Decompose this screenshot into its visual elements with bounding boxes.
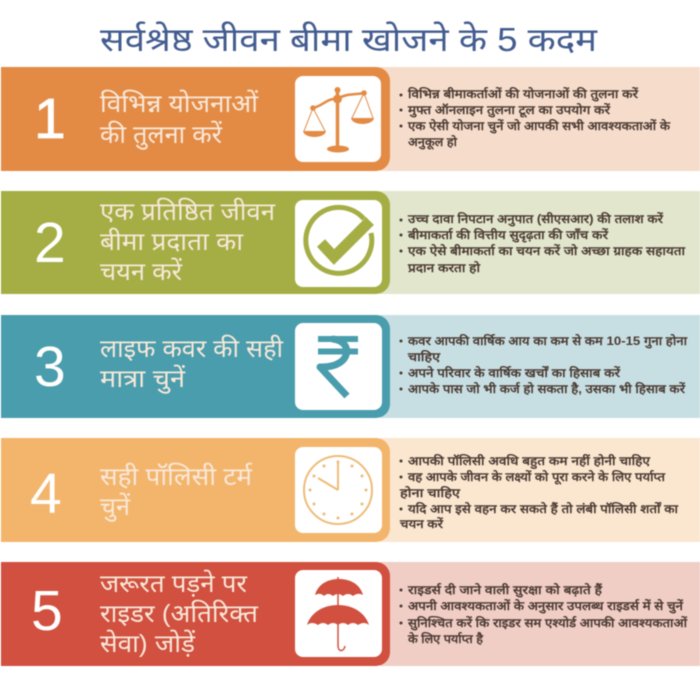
step 3 heading: लाइफ कवर की सही <box>100 334 284 363</box>
step 4 heading: सही पॉलिसी टर्म <box>100 462 253 491</box>
step 2 details: प्रदान करता हो <box>407 261 481 275</box>
step 2 details <box>400 212 686 275</box>
step 3 details: अपने परिवार के वार्षिक खर्चों का हिसाब करें <box>408 366 621 380</box>
step 1 heading <box>100 89 258 150</box>
panel: step 3 <box>1 315 700 418</box>
step 4 icon: clock <box>295 447 382 533</box>
step 5 heading: सेवा) जोड़ें <box>100 629 196 658</box>
step 2 details: उच्च दावा निपटान अनुपात (सीएसआर) की तलाश करें <box>407 212 664 227</box>
step 1 heading: की तुलना करें <box>100 120 223 150</box>
step 2 heading <box>100 197 276 286</box>
step 2 heading: एक प्रतिष्ठित जीवन <box>100 197 276 226</box>
step 3 detail background <box>380 315 700 418</box>
step 5 colour band <box>1 562 390 666</box>
step 1 number: 1 <box>34 87 66 151</box>
step 1 details: एक ऐसी योजना चुनें जो आपकी सभी आवश्यकताओं के <box>407 119 671 134</box>
step 1 details: मुफ्त ऑनलाइन तुलना टूल का उपयोग करें <box>407 103 611 118</box>
step 5 details: राइडर्स दी जाने वाली सुरक्षा को बढ़ाते हैं <box>407 583 603 598</box>
step 3 details: आपके पास जो भी कर्ज हो सकता है, उसका भी हिसाब करें <box>408 382 686 396</box>
step 3 details: चाहिए <box>407 350 442 364</box>
step 3 heading: मात्रा चुनें <box>100 364 186 394</box>
step 4 details <box>399 453 679 531</box>
step 4 details: यदि आप इसे वहन कर सकते हैं तो लंबी पॉलिसी शर्तों का <box>407 502 679 516</box>
step 4 number: 4 <box>30 462 62 526</box>
step 1 details <box>400 87 671 150</box>
step 5 icon: umbrellas <box>295 570 382 657</box>
step 4 heading <box>100 462 253 522</box>
step 2 number: 2 <box>34 211 66 275</box>
step 1 details: अनुकूल हो <box>408 135 458 150</box>
step 1 icon: scales <box>295 76 381 162</box>
step 2 colour band <box>1 191 390 294</box>
step 4 details: आपकी पॉलिसी अवधि बहुत कम नहीं होनी चाहिए <box>408 453 652 470</box>
step 5 number: 5 <box>31 579 63 643</box>
step 2 heading: बीमा प्रदाता का <box>100 227 244 256</box>
step 5 details: के लिए पर्याप्त है <box>407 632 484 646</box>
step 3 number: 3 <box>34 335 66 399</box>
step 3 icon: rupee <box>295 323 382 410</box>
step 2 details: बीमाकर्ता की वित्तीय सुदृढ़ता की जाँच करें <box>407 228 609 243</box>
step 1 colour band <box>1 67 390 171</box>
step 3 heading <box>100 334 284 394</box>
step 4 colour band <box>1 438 390 542</box>
step 5 heading <box>100 569 259 658</box>
step 5 heading: राइडर (अतिरिक्त <box>100 599 259 628</box>
step 5 details: अपनी आवश्यकताओं के अनुसार उपलब्ध राइडर्स में से चुनें <box>408 599 684 614</box>
step 1 details: विभिन्न बीमाकर्ताओं की योजनाओं की तुलना करें <box>407 87 639 102</box>
step 2 icon: check mark <box>295 200 382 287</box>
step 3 details: कवर आपकी वार्षिक आय का कम से कम 10-15 गुना होना <box>407 334 688 349</box>
step 3 details <box>400 334 688 396</box>
title: सर्वश्रेष्ठ जीवन बीमा खोजने के 5 कदम <box>100 21 598 58</box>
panel: step 4 <box>1 438 700 542</box>
step 5 detail background <box>380 562 700 666</box>
panel: step 2 <box>1 191 700 294</box>
step 5 details: सुनिश्चित करें कि राइडर सम एश्योर्ड आपकी आवश्यकताओं <box>407 616 688 631</box>
panel: step 1 <box>1 67 700 171</box>
step 4 details: वह आपके जीवन के लक्ष्यों को पूरा करने के लिए पर्याप्त <box>407 470 666 485</box>
step 2 heading: चयन करें <box>100 257 183 286</box>
step 4 detail background <box>380 438 700 542</box>
panel: step 5 <box>1 562 700 666</box>
step 5 heading: जरूरत पड़ने पर <box>100 569 248 598</box>
step 4 details: चयन करें <box>399 517 444 531</box>
step 2 detail background <box>380 191 700 294</box>
step 4 heading: चुनें <box>100 492 131 522</box>
step 1 detail background <box>380 67 700 171</box>
step 2 details: एक ऐसे बीमाकर्ता का चयन करें जो अच्छा ग्राहक सहायता <box>407 244 686 258</box>
step 4 details: होना चाहिए <box>399 486 462 500</box>
step 1 heading: विभिन्न योजनाओं <box>100 89 258 118</box>
step 5 details <box>400 583 688 646</box>
step 3 colour band <box>1 315 390 418</box>
